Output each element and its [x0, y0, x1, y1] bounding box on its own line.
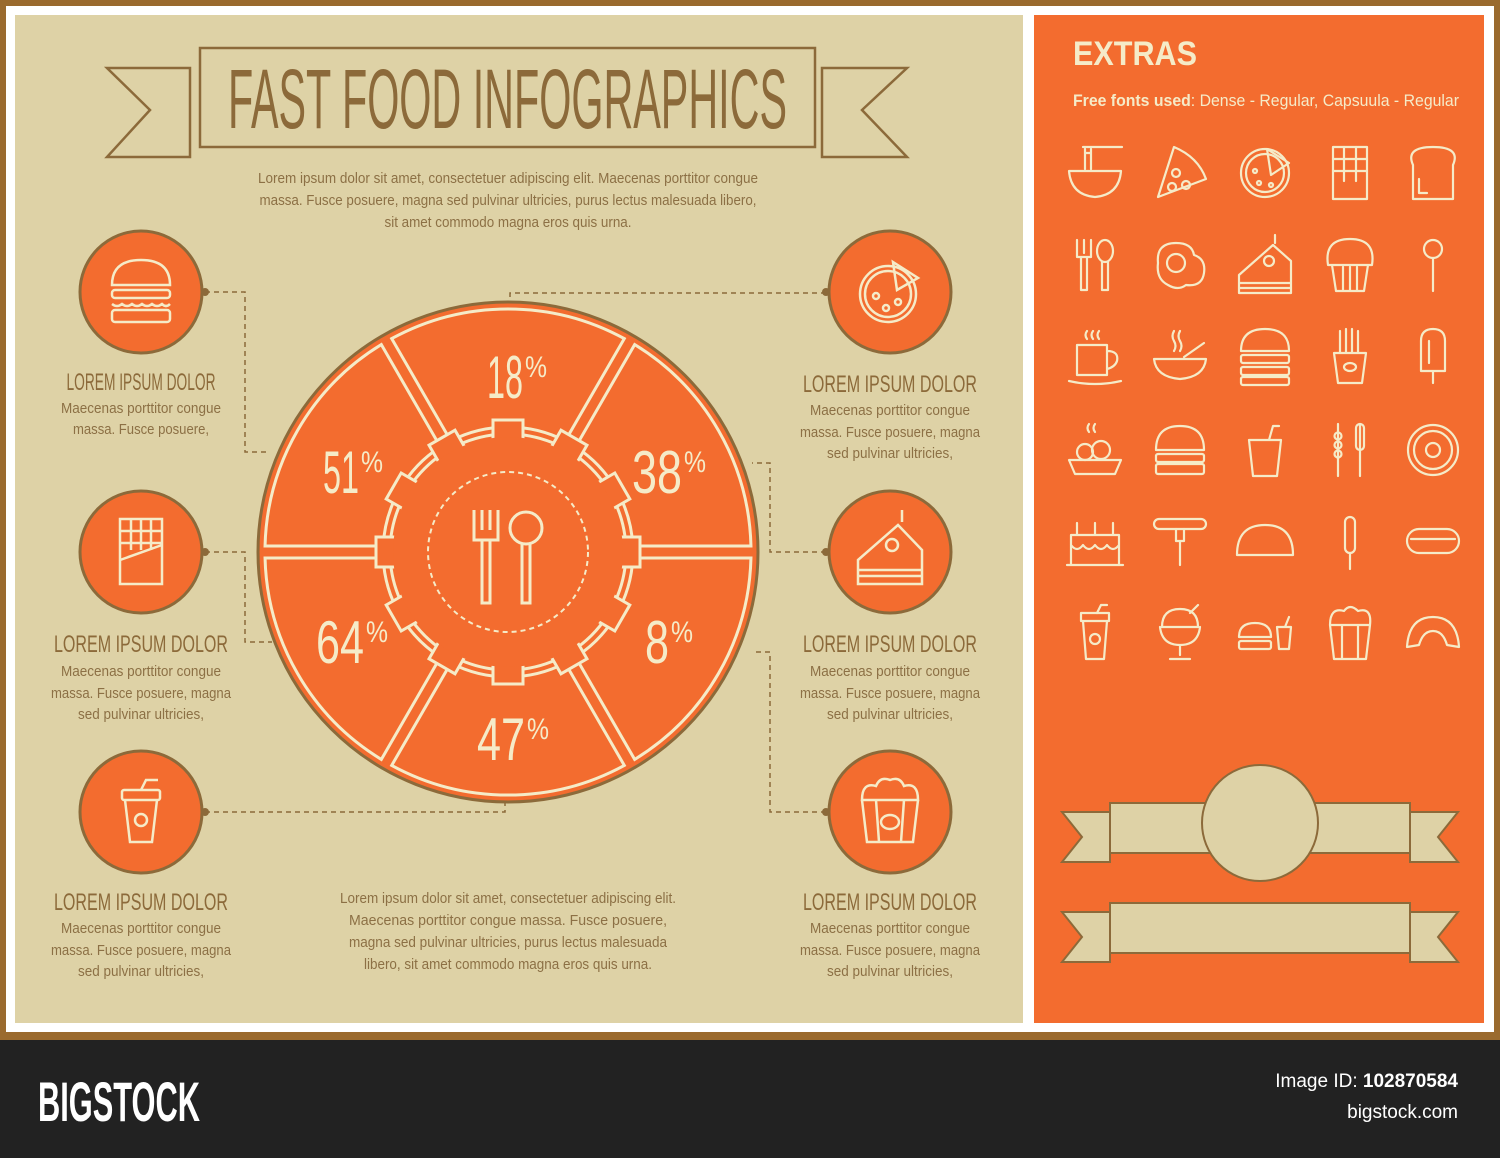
icon: pizza slice — [1158, 147, 1206, 197]
icon: fries — [1334, 329, 1366, 383]
icon: takeaway cup — [1081, 605, 1109, 659]
item: left 2 chocolate: Maecenas porttitor congue — [61, 663, 221, 680]
bottom paragraph: magna sed pulvinar ultricies, purus lectus malesuada — [349, 934, 668, 951]
item: right 1 pizza: LOREM IPSUM DOLOR — [803, 371, 977, 398]
percentages: 64 — [316, 609, 364, 676]
icon: cake slice — [1239, 235, 1291, 293]
item: right 3 popcorn: sed pulvinar ultricies, — [827, 963, 953, 980]
percentages: % — [671, 616, 693, 649]
item: left 3 drink: massa. Fusce posuere, magna — [51, 942, 232, 959]
icon: pizza — [1241, 149, 1289, 197]
gear — [376, 420, 640, 684]
item: left 2 chocolate: massa. Fusce posuere, magna — [51, 685, 232, 702]
item: left 3 drink: Maecenas porttitor congue — [61, 920, 221, 937]
panel: main beige — [15, 15, 1023, 1023]
icon: popsicle — [1421, 329, 1445, 383]
footer image id: Image ID: 102870584 — [1275, 1071, 1458, 1092]
bottom paragraph — [340, 890, 676, 973]
icon: lollipop — [1424, 240, 1442, 291]
item: right 2 cake: sed pulvinar ultricies, — [827, 706, 953, 723]
icon: burger 2 — [1156, 426, 1204, 474]
percentages: % — [684, 446, 706, 479]
item: left 2 chocolate: LOREM IPSUM DOLOR — [54, 631, 228, 658]
icon grid — [1067, 147, 1459, 659]
title banner: FAST FOOD INFOGRAPHICS — [228, 52, 787, 146]
icon: sausage fork — [1154, 519, 1206, 565]
item: right 2 cake: LOREM IPSUM DOLOR — [803, 631, 977, 658]
icon: skewers — [1334, 424, 1364, 476]
icon: burger and drink — [1239, 617, 1291, 649]
icon: popcorn — [1330, 607, 1370, 659]
item: right 3 popcorn — [800, 751, 981, 980]
footer bar — [0, 1040, 1500, 1158]
item: left 2 chocolate: sed pulvinar ultricies, — [78, 706, 204, 723]
intro paragraph — [258, 170, 758, 231]
title banner — [107, 48, 907, 157]
bottom paragraph: libero, sit amet commodo magna eros quis urna. — [364, 956, 652, 973]
icon: fork spoon — [1077, 240, 1113, 290]
percentages: 38 — [632, 439, 682, 506]
item: left 1 burger: LOREM IPSUM DOLOR — [66, 369, 216, 396]
bottom paragraph: Maecenas porttitor congue massa. Fusce posuere, — [349, 912, 667, 929]
ribbon: with circle — [1062, 765, 1458, 881]
extras heading: EXTRAS — [1073, 35, 1197, 73]
item: right 3 popcorn: Maecenas porttitor congue — [810, 920, 970, 937]
icon: croissant — [1407, 617, 1459, 647]
item: right 1 pizza — [800, 231, 981, 462]
item: right 2 cake: Maecenas porttitor congue — [810, 663, 970, 680]
intro paragraph: massa. Fusce posuere, magna sed pulvinar ultricies, purus lectus malesuada libero, — [260, 192, 756, 209]
icon: chocolate bar — [1333, 147, 1367, 199]
item: left 1 burger: massa. Fusce posuere, — [73, 421, 209, 438]
ribbon: plain — [1062, 903, 1458, 962]
item: right 1 pizza: Maecenas porttitor congue — [810, 402, 970, 419]
icon: egg — [1158, 243, 1204, 288]
footer url: bigstock.com — [1347, 1102, 1458, 1123]
item: right 1 pizza: massa. Fusce posuere, magna — [800, 424, 981, 441]
icon: fork and spoon — [474, 510, 542, 603]
icon: taco — [1237, 525, 1293, 555]
percentages — [316, 344, 706, 773]
intro paragraph: sit amet commodo magna eros quis urna. — [384, 214, 632, 231]
percentages: 47 — [477, 706, 525, 773]
item: right 3 popcorn: massa. Fusce posuere, magna — [800, 942, 981, 959]
fonts note: Free fonts used: Dense - Regular, Capsuula - Regular — [1073, 91, 1459, 110]
icon: muffin — [1327, 239, 1373, 291]
percentages: 51 — [323, 439, 359, 506]
item: left 3 drink — [51, 751, 232, 980]
icon: corndog — [1345, 517, 1355, 569]
icon: soup bowl — [1154, 331, 1206, 379]
icon: hotdog — [1407, 529, 1459, 553]
percentages: % — [366, 616, 388, 649]
bottom paragraph: Lorem ipsum dolor sit amet, consectetuer adipiscing elit. — [340, 890, 676, 907]
item: left 3 drink: sed pulvinar ultricies, — [78, 963, 204, 980]
panel: extras orange — [1034, 15, 1484, 1023]
connectors — [205, 292, 826, 812]
percentages: 8 — [645, 609, 669, 676]
chart: circular segments — [239, 302, 777, 802]
icon: donut — [1408, 425, 1458, 475]
percentages: % — [525, 351, 547, 384]
footer logo: BIGSTOCK — [38, 1070, 200, 1133]
item: left 1 burger: Maecenas porttitor congue — [61, 400, 221, 417]
intro paragraph: Lorem ipsum dolor sit amet, consectetuer adipiscing elit. Maecenas porttitor congue — [258, 170, 758, 187]
item: right 1 pizza: sed pulvinar ultricies, — [827, 445, 953, 462]
item: right 2 cake: massa. Fusce posuere, magna — [800, 685, 981, 702]
percentages: % — [361, 446, 383, 479]
item: right 2 cake — [800, 491, 981, 723]
icon: coffee cup — [1069, 331, 1121, 384]
icon: burger — [1241, 329, 1289, 385]
item: left 2 chocolate — [51, 491, 232, 723]
icon: ice cream — [1160, 605, 1200, 659]
icon: bread — [1411, 147, 1455, 199]
item: right 3 popcorn: LOREM IPSUM DOLOR — [803, 889, 977, 916]
icon: soda — [1249, 426, 1281, 476]
item: left 3 drink: LOREM IPSUM DOLOR — [54, 889, 228, 916]
percentages: 18 — [487, 344, 523, 411]
icon: birthday cake — [1067, 523, 1123, 565]
icon: noodle bowl — [1069, 147, 1122, 197]
percentages: % — [527, 713, 549, 746]
icon: pasta — [1069, 424, 1121, 474]
item: left 1 burger — [61, 231, 221, 438]
